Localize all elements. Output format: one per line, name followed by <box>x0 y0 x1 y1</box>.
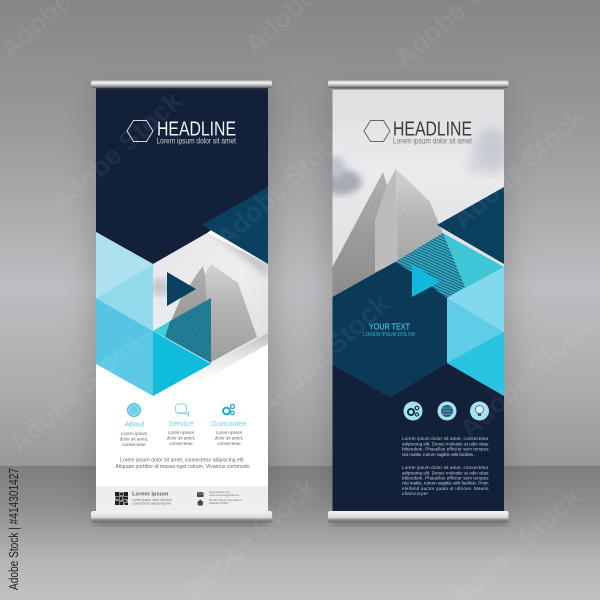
icon: gears circle <box>404 402 422 420</box>
right top roller <box>328 80 508 90</box>
left banner teal triangle <box>202 187 268 264</box>
right banner paragraph one: bibendum. Phasellus efficitur sem tempus <box>402 446 489 452</box>
right banner paragraph two: bibendum. Phasellus efficitur sem tempus <box>402 476 489 480</box>
right banner paragraph one: adipiscing elit. Donec molestie at odio vitae <box>402 442 489 446</box>
left top roller <box>91 80 272 90</box>
right banner clouds <box>318 126 510 195</box>
column: About <box>120 420 148 447</box>
column: Service: consectetur <box>169 441 193 446</box>
left bottom roller <box>91 511 272 522</box>
watermark: Adobe Stock repeated: Adobe Stock <box>210 120 353 253</box>
column: About: About <box>125 420 145 428</box>
watermark: Adobe Stock repeated: Adobe Stock <box>45 85 188 218</box>
column: Service: dolor sit amet, <box>167 436 195 440</box>
right banner play triangle <box>412 264 440 297</box>
icon: speech bubbles <box>176 404 188 416</box>
right banner paragraph two <box>402 465 489 496</box>
watermark: Adobe Stock repeated: Adobe Stock <box>454 311 597 444</box>
icon: globe <box>128 404 140 416</box>
your text label: LOREM IPSUM DOLOR <box>363 332 415 338</box>
icon: light bulb circle <box>470 402 489 420</box>
left banner footer: 55 Main Street, City address <box>209 498 242 502</box>
left hexagon facets <box>96 232 211 396</box>
left banner headline <box>127 118 236 146</box>
left banner footer: name.surname@mail.com <box>209 493 239 497</box>
right banner paragraph one: Lorem ipsum dolor sit amet, consectetur <box>402 436 489 441</box>
left banner paragraph: Lorem ipsum dolor sit amet, consectetur adipiscing elit. <box>120 458 245 464</box>
right banner headline: Lorem ipsum dolor sit amet <box>393 136 472 146</box>
right banner paragraph one <box>402 436 489 457</box>
right banner paragraph two: nisi mattis, rutrum sagittis velit facilisis. Proin <box>402 480 489 486</box>
right banner headline <box>364 118 472 146</box>
column: About: consectetur <box>122 442 146 447</box>
column: Guarantee <box>211 419 247 446</box>
icon: home <box>197 500 204 506</box>
left banner footer: www.website.com <box>209 490 230 494</box>
right banner turquoise triangle <box>443 233 504 298</box>
left banner headline: Lorem ipsum dolor sit amet <box>156 136 236 146</box>
background: banner shadows <box>90 90 510 510</box>
right banner building <box>332 169 465 300</box>
left banner footer: Lorem ipsum dolor sit amet <box>132 498 172 502</box>
right banner paragraph two: adipiscing elit. Donec molestie at odio vitae <box>402 470 489 476</box>
watermark: Adobe Stock repeated: Adobe Stock <box>447 101 590 234</box>
icon: gears <box>223 404 234 415</box>
panel: right roll-up banner <box>318 80 510 522</box>
right hexagon facets <box>447 267 504 396</box>
background: wall <box>0 0 600 467</box>
left banner footer: Database 87654 <box>209 501 229 505</box>
left banner paragraph <box>116 458 250 470</box>
background: floor shadows under banners <box>95 520 507 526</box>
right banner sky <box>332 88 504 328</box>
left banner footer: Lorem ipsum <box>132 492 168 498</box>
right banner paragraph one: nisi mattis, rutrum sagittis velit facilisis. <box>402 452 474 457</box>
background: floor <box>0 466 600 600</box>
icon: globe circle <box>438 402 456 420</box>
your text label <box>363 322 415 338</box>
right banner paragraph two: eleifend auctor quam ut ultrices. Mauris <box>402 486 489 491</box>
your text label: YOUR TEXT <box>369 322 410 332</box>
left banner white base <box>96 88 268 511</box>
panel: left roll-up banner <box>91 80 272 522</box>
column: Guarantee: Guarantee <box>211 419 247 428</box>
left banner play triangle <box>167 272 196 306</box>
icon: hexagon outline <box>364 120 390 142</box>
watermark: Adobe Stock repeated: Adobe Stock <box>252 288 395 421</box>
icon: QR code <box>115 492 128 505</box>
left banner headline: HEADLINE <box>157 118 236 140</box>
right banner paragraph two: Lorem ipsum dolor sit amet, consectetur <box>402 465 489 470</box>
right banner navy triangle <box>437 187 504 264</box>
column: About: Lorem ipsum <box>121 431 147 436</box>
column: Guarantee: dolor sit amet, <box>215 436 243 440</box>
right bottom roller <box>328 511 508 522</box>
column: Service: Lorem ipsum <box>168 430 194 435</box>
left banner footer: Consectetur adipiscing elit <box>132 502 171 506</box>
left banner shadow below photo <box>153 333 268 396</box>
credit: vertical stock ID: Adobe Stock | #414301427 <box>7 468 21 590</box>
icon: hexagon outline <box>127 120 153 142</box>
column: Guarantee: consectetur <box>217 441 241 446</box>
column: Guarantee: Lorem ipsum <box>216 430 242 435</box>
right banner headline: HEADLINE <box>393 118 472 140</box>
icon: mail <box>197 492 204 497</box>
left banner footer <box>96 486 268 511</box>
left banner photo area <box>153 233 268 364</box>
right banner dark hexagon <box>332 262 447 397</box>
right banner paragraph two: ullamcorper <box>402 491 428 496</box>
left banner building <box>165 264 257 362</box>
left banner paragraph: Aliquam porttitor id massa eget rutrum. Vivamus commodo <box>116 464 250 470</box>
left banner dark top <box>96 88 268 264</box>
right banner striped teal overlay <box>395 233 465 298</box>
column: Service <box>167 419 195 446</box>
watermark: Adobe Stock repeated: Adobe Stock <box>3 326 146 459</box>
column: Service: Service <box>168 419 194 428</box>
right banner lower dark <box>332 363 504 511</box>
column: About: dolor sit amet, <box>120 436 148 442</box>
